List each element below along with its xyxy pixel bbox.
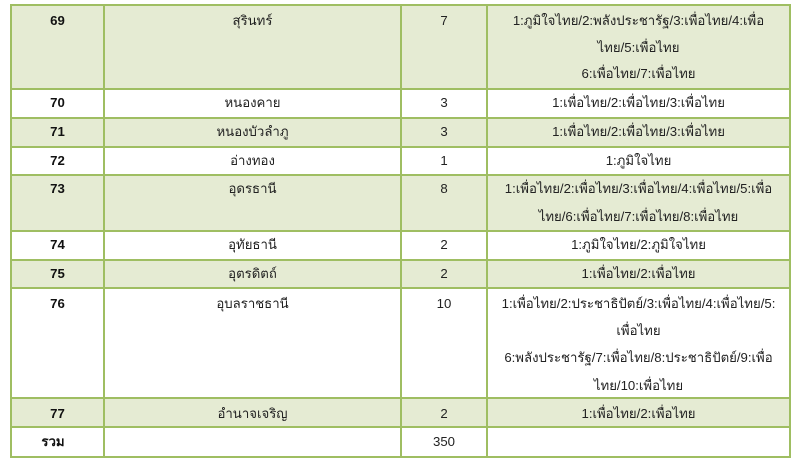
row 70: 1:เพื่อไทย/2:เพื่อไทย/3:เพื่อไทย bbox=[552, 95, 725, 110]
row 75: 1:เพื่อไทย/2:เพื่อไทย bbox=[581, 266, 696, 281]
row 74: 1:ภูมิใจไทย/2:ภูมิใจไทย bbox=[571, 237, 706, 252]
row 71: หนองบัวลำภู bbox=[216, 124, 289, 139]
row 72: อ่างทอง bbox=[230, 153, 275, 168]
row 71: 71 bbox=[50, 124, 65, 139]
row 70: 70 bbox=[50, 95, 65, 110]
row 76: 6:พลังประชารัฐ/7:เพื่อไทย/8:ประชาธิปัตย์/9:เพื่อ bbox=[504, 350, 773, 365]
row 69 bbox=[12, 6, 789, 88]
row 72: 72 bbox=[50, 153, 65, 168]
row 77: 77 bbox=[50, 406, 65, 421]
row 69: สุรินทร์ bbox=[233, 13, 272, 28]
row 70: หนองคาย bbox=[224, 95, 281, 110]
row 76 bbox=[12, 289, 789, 397]
row 73: อุดรธานี bbox=[228, 181, 277, 196]
row 73: ไทย/6:เพื่อไทย/7:เพื่อไทย/8:เพื่อไทย bbox=[539, 209, 738, 224]
row 73: 1:เพื่อไทย/2:เพื่อไทย/3:เพื่อไทย/4:เพื่อไทย/5:เพื่อ bbox=[505, 181, 772, 196]
row total: 350 bbox=[433, 434, 455, 449]
row 76: 10 bbox=[437, 296, 451, 311]
row 71: 1:เพื่อไทย/2:เพื่อไทย/3:เพื่อไทย bbox=[552, 124, 725, 139]
row 76: 76 bbox=[50, 296, 65, 311]
row 69: 1:ภูมิใจไทย/2:พลังประชารัฐ/3:เพื่อไทย/4:เพื่อ bbox=[513, 13, 764, 28]
row 73: 73 bbox=[50, 181, 65, 196]
row 74: 2 bbox=[440, 237, 448, 252]
row 69: 7 bbox=[440, 13, 448, 28]
row 69: 6:เพื่อไทย/7:เพื่อไทย bbox=[581, 66, 696, 81]
row 75 bbox=[12, 261, 789, 287]
row 69: ไทย/5:เพื่อไทย bbox=[598, 40, 679, 55]
row 72: 1:ภูมิใจไทย bbox=[606, 153, 671, 168]
row 77: 2 bbox=[440, 406, 448, 421]
row 72: 1 bbox=[440, 153, 448, 168]
row 75: 75 bbox=[50, 266, 65, 281]
row 76: ไทย/10:เพื่อไทย bbox=[594, 378, 683, 393]
row 77 bbox=[12, 399, 789, 426]
row 73 bbox=[12, 176, 789, 230]
row 74: อุทัยธานี bbox=[228, 237, 277, 252]
row 74: 74 bbox=[50, 237, 65, 252]
row 76: อุบลราชธานี bbox=[216, 296, 289, 311]
row 74 bbox=[12, 232, 789, 259]
row 70: 3 bbox=[440, 95, 448, 110]
row 72 bbox=[12, 148, 789, 174]
row 76: เพื่อไทย bbox=[616, 323, 661, 338]
row total bbox=[12, 428, 789, 456]
row 70 bbox=[12, 90, 789, 117]
row 73: 8 bbox=[440, 181, 448, 196]
row 76: 1:เพื่อไทย/2:ประชาธิปัตย์/3:เพื่อไทย/4:เพื่อไทย/5: bbox=[502, 296, 775, 311]
row 75: 2 bbox=[440, 266, 448, 281]
row 77: 1:เพื่อไทย/2:เพื่อไทย bbox=[581, 406, 696, 421]
row 75: อุตรดิตถ์ bbox=[228, 266, 277, 281]
row total: รวม bbox=[41, 434, 65, 449]
row 69: 69 bbox=[50, 13, 65, 28]
row 71: 3 bbox=[440, 124, 448, 139]
row 71 bbox=[12, 119, 789, 146]
row 77: อำนาจเจริญ bbox=[217, 406, 288, 421]
